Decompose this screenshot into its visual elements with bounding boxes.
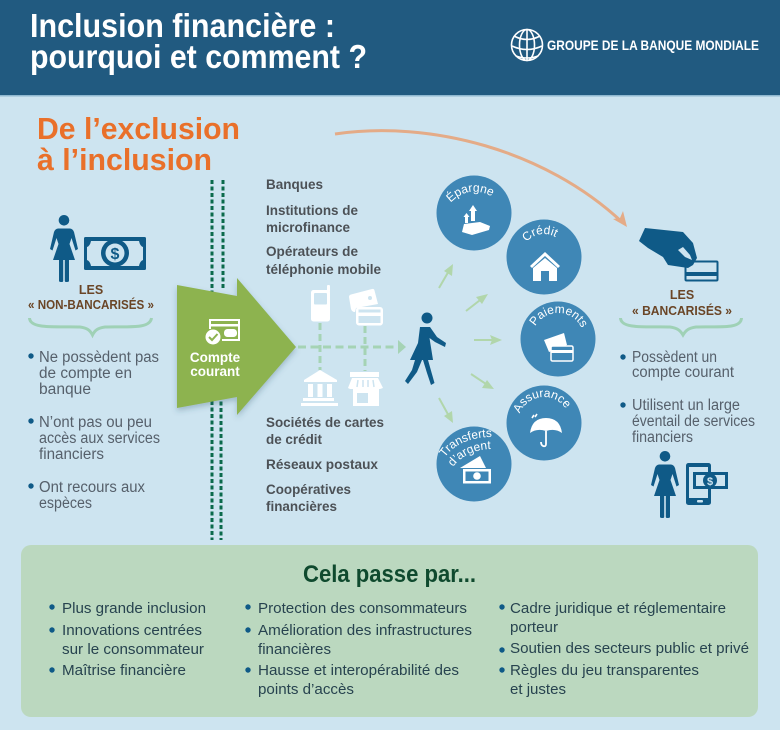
list: column 2: Amélioration des infrastructures xyxy=(258,622,472,639)
icon: umbrella xyxy=(530,414,562,446)
icon: globe xyxy=(512,30,542,60)
list: column 2 xyxy=(245,600,472,698)
panel: cela passe par xyxy=(21,545,758,717)
provider list: top: Opérateurs de xyxy=(266,244,358,259)
panel: banked xyxy=(620,228,755,518)
provider icons xyxy=(301,285,383,406)
bullet list: banked: Possèdent un xyxy=(632,349,717,366)
heading: from exclusion to inclusion xyxy=(37,111,240,177)
icon: phone with banknote: $ xyxy=(707,476,713,488)
provider network connectors xyxy=(298,323,406,371)
provider list: bottom: de crédit xyxy=(266,432,322,447)
list: column 3: porteur xyxy=(510,619,558,636)
label: bancarisés: « BANCARISÉS » xyxy=(632,303,732,318)
dotted divider xyxy=(212,180,223,540)
service: transferts d'argent: d’argent xyxy=(449,441,491,466)
list: column 2: Hausse et interopérabilité des xyxy=(258,662,459,679)
heading: Cela passe par... xyxy=(303,561,476,588)
provider list: bottom: Coopératives xyxy=(266,482,351,497)
bullet list: unbanked xyxy=(28,349,160,512)
arrow: compte courant xyxy=(177,278,296,415)
icon: hand with card xyxy=(639,228,718,280)
bullet list: banked: éventail de services xyxy=(632,413,755,430)
header banner xyxy=(0,0,780,96)
provider list: top: Banques xyxy=(266,177,323,192)
icon: mobile phone xyxy=(311,285,330,322)
brace xyxy=(620,318,742,335)
title xyxy=(30,7,367,75)
icon: cards xyxy=(544,333,573,361)
service: assurance: Assurance xyxy=(514,390,570,414)
bullet list: unbanked: banque xyxy=(39,381,91,398)
label: non-bancarisés: LES xyxy=(79,283,103,297)
title: pourquoi et comment ? xyxy=(30,38,367,75)
icon: card with check xyxy=(206,320,239,344)
list: column 3: Cadre juridique et réglementaire xyxy=(510,600,726,617)
bullet list: unbanked: de compte en xyxy=(39,365,132,382)
title: Inclusion financière : xyxy=(30,7,335,44)
service: épargne xyxy=(436,176,512,250)
World Bank logo xyxy=(512,30,759,60)
icon: walking woman xyxy=(405,312,446,385)
icon: savings xyxy=(462,205,490,235)
list: column 1: Plus grande inclusion xyxy=(62,600,206,617)
provider list: bottom: Réseaux postaux xyxy=(266,457,378,472)
list: column 3 xyxy=(499,600,749,698)
bullet list: banked: Utilisent un large xyxy=(632,397,740,414)
bullet list: banked xyxy=(620,349,755,446)
bullet list: unbanked: Ont recours aux xyxy=(39,479,145,496)
bullet list: banked: financiers xyxy=(632,429,693,446)
service: transferts d'argent: Transferts xyxy=(438,430,492,456)
bullet list: unbanked: N’ont pas ou peu xyxy=(39,414,152,431)
brace xyxy=(30,318,152,335)
icon: phone with banknote xyxy=(686,463,728,505)
service: épargne: Épargne xyxy=(446,185,494,202)
provider list: top: Institutions de xyxy=(266,203,358,218)
bullet list: unbanked: financiers xyxy=(39,446,104,463)
label: non-bancarisés: « NON-BANCARISÉS » xyxy=(28,297,154,312)
arrow: compte courant: courant xyxy=(190,364,240,379)
icon: bank xyxy=(301,370,338,406)
icon: woman xyxy=(50,215,78,282)
provider list: bottom: Sociétés de cartes xyxy=(266,415,384,430)
icon: payment cards xyxy=(349,289,383,326)
service: crédit: Crédit xyxy=(522,225,558,240)
list: column 2: financières xyxy=(258,641,331,658)
service: paiements: Paiements xyxy=(529,306,586,327)
icon: banknotes xyxy=(460,456,491,484)
icon: house xyxy=(530,252,560,281)
icon: woman xyxy=(651,451,679,518)
icon: shop xyxy=(348,372,383,406)
provider list: bottom: financières xyxy=(266,499,337,514)
label: non-bancarisés xyxy=(28,283,154,312)
list: column 1: Maîtrise financière xyxy=(62,662,186,679)
arrow: curved exclusion to inclusion xyxy=(335,131,627,227)
list: column 2: Protection des consommateurs xyxy=(258,600,467,617)
arrows: person to services xyxy=(439,264,502,423)
icon: banknote xyxy=(84,237,146,270)
panel: unbanked xyxy=(28,215,160,512)
list: column 3: Règles du jeu transparentes xyxy=(510,662,699,679)
provider list: top: microfinance xyxy=(266,220,350,235)
list: column 3: Soutien des secteurs public et privé xyxy=(510,640,749,657)
provider list: top xyxy=(266,177,381,277)
service: assurance xyxy=(506,386,582,460)
bullet list: banked: compte courant xyxy=(632,364,735,381)
bullet list: unbanked: accès aux services xyxy=(39,430,160,447)
label: bancarisés: LES xyxy=(670,288,694,302)
provider list: top: téléphonie mobile xyxy=(266,262,381,277)
heading: from exclusion to inclusion: De l’exclusion xyxy=(37,111,240,146)
arrow: compte courant: Compte xyxy=(190,350,241,365)
list: column 2: points d’accès xyxy=(258,681,354,698)
service: transferts d'argent xyxy=(436,426,512,502)
provider list: bottom xyxy=(266,415,384,514)
list: column 1: Innovations centrées xyxy=(62,622,202,639)
list: column 3: et justes xyxy=(510,681,566,698)
service: paiements xyxy=(520,302,596,376)
icon: banknote: $ xyxy=(111,246,120,263)
heading: from exclusion to inclusion: à l’inclusion xyxy=(37,142,212,177)
bullet list: unbanked: espèces xyxy=(39,495,92,512)
list: column 1: sur le consommateur xyxy=(62,641,204,658)
service: crédit xyxy=(506,220,582,294)
label: bancarisés xyxy=(632,288,732,318)
list: column 1 xyxy=(49,600,206,679)
bullet list: unbanked: Ne possèdent pas xyxy=(39,349,159,366)
